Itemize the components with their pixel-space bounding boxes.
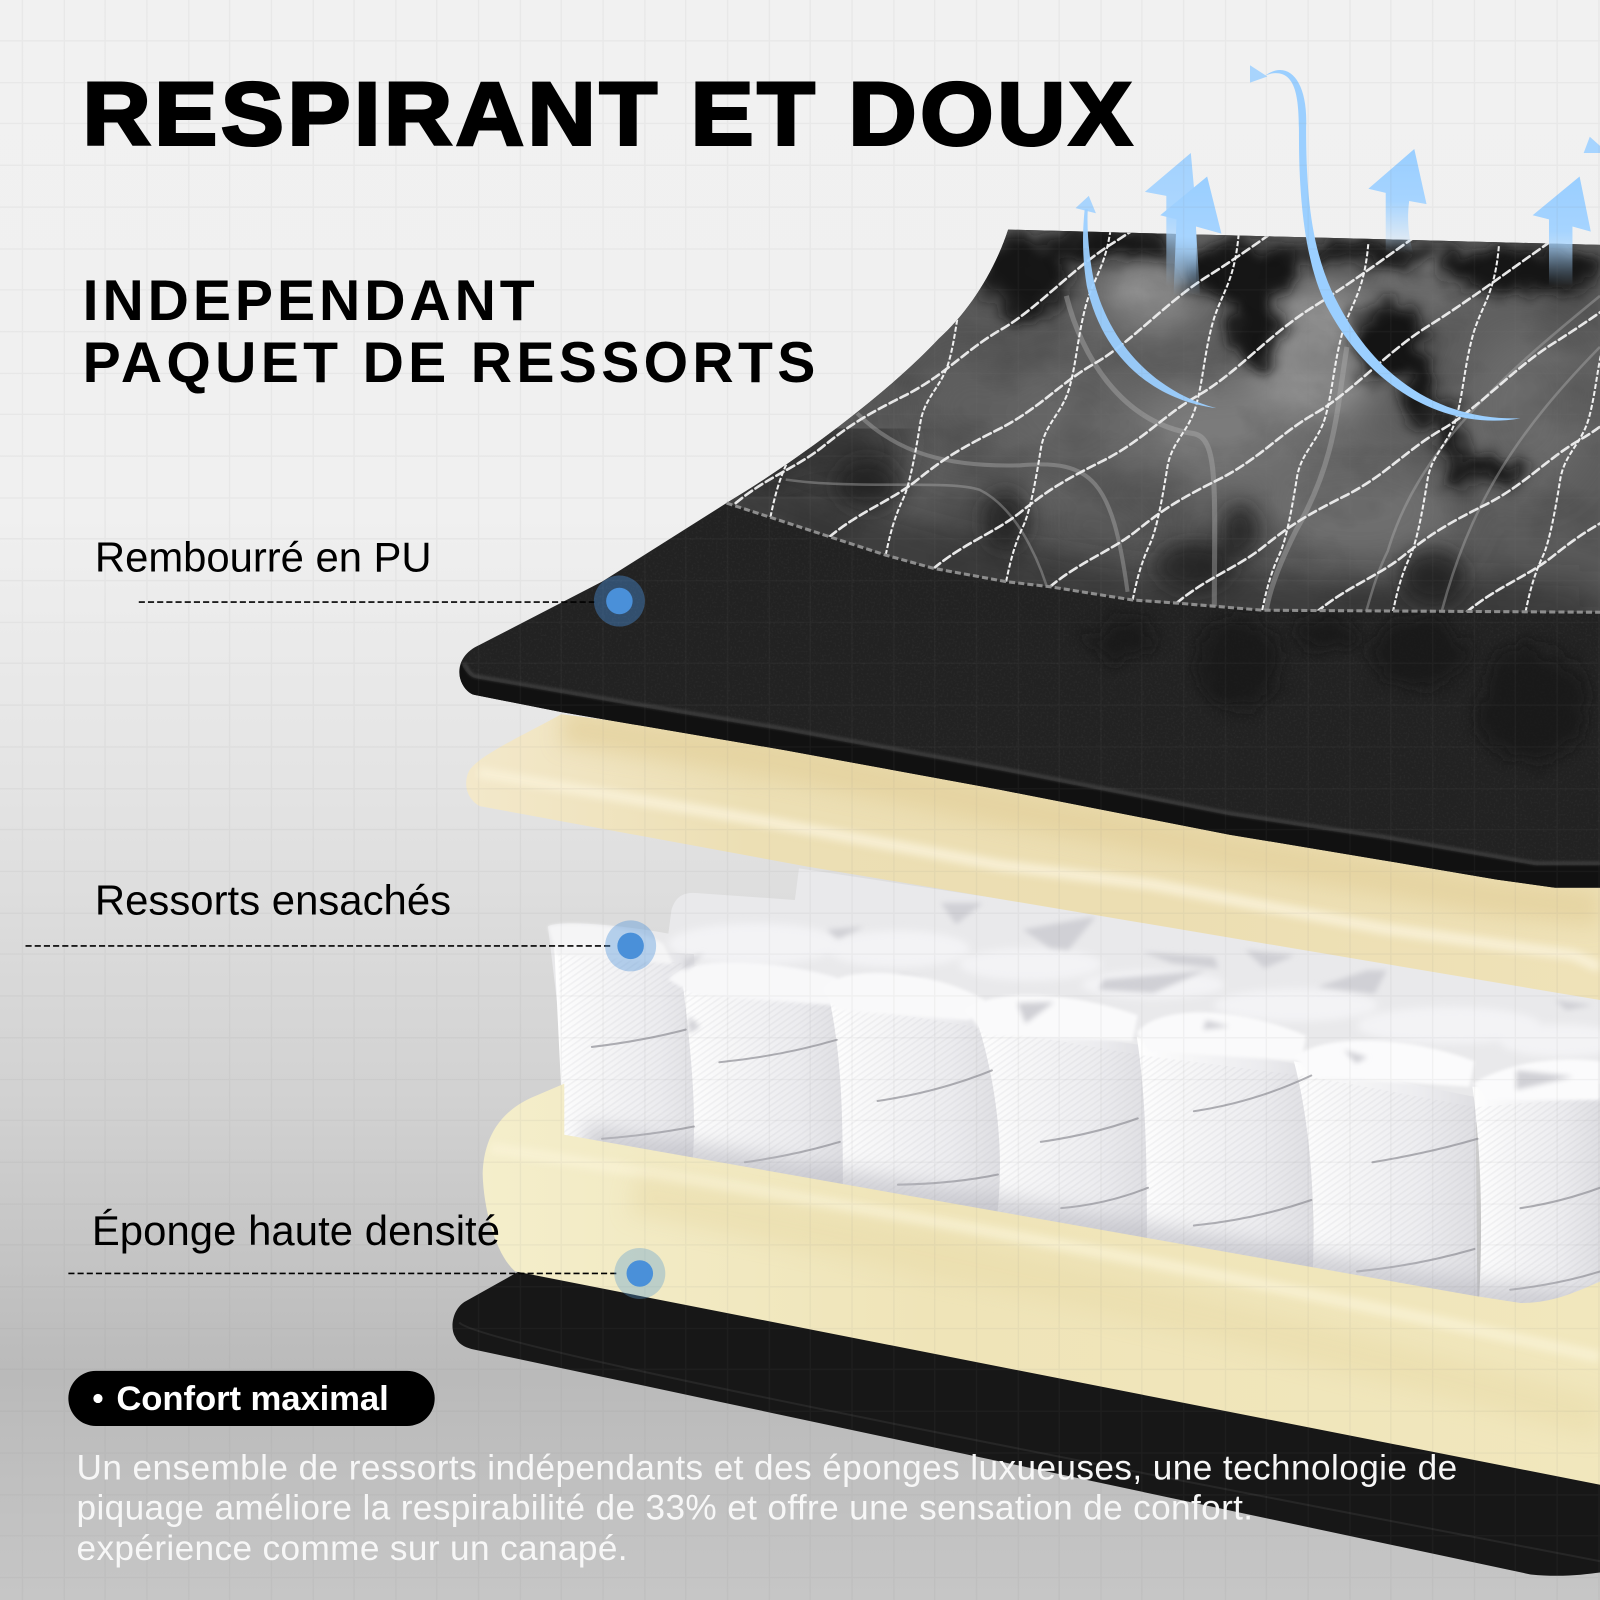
vertical stitching bbox=[770, 232, 1600, 611]
description paragraph: expérience comme sur un canapé. bbox=[77, 1529, 628, 1568]
faint air strands bbox=[786, 296, 1600, 622]
icon: block arrow 3 bbox=[1368, 149, 1427, 253]
layer: pocket springs bbox=[548, 868, 1600, 1327]
seam-side darkening bbox=[714, 480, 1600, 612]
diagonal stitching bbox=[734, 232, 1600, 612]
description paragraph bbox=[77, 1449, 1457, 1568]
badge: Confort maximal: Confort maximal bbox=[116, 1380, 389, 1418]
subtitle: PAQUET DE RESSORTS bbox=[83, 331, 815, 395]
subtitle: INDEPENDANT bbox=[83, 269, 535, 333]
dark ink blots upper bbox=[983, 229, 1600, 486]
callout: Rembourré en PU bbox=[95, 533, 645, 627]
leather grain bbox=[649, 536, 1566, 770]
title: RESPIRANT ET DOUX bbox=[83, 64, 1136, 163]
icon: edge arrow head bbox=[1584, 137, 1600, 153]
callout: Rembourré en PU: Rembourré en PU bbox=[95, 533, 432, 580]
airflow arrows bbox=[1076, 65, 1600, 421]
back rows of spring tops bbox=[548, 868, 1600, 1122]
spring seam lines bbox=[592, 1030, 1600, 1290]
layer: PU top cover bbox=[459, 230, 1600, 888]
spring collars bbox=[548, 924, 1600, 1100]
callout: Ressorts ensachés: Ressorts ensachés bbox=[95, 876, 451, 923]
icon: curved airflow arrow left bbox=[1076, 196, 1216, 408]
collar openings bbox=[685, 953, 1573, 1090]
subtitle bbox=[83, 269, 815, 395]
cover front edge band bbox=[449, 663, 1600, 898]
icon: block arrow 1 bbox=[1145, 153, 1196, 286]
icon: block arrow 2 bbox=[1160, 177, 1221, 296]
callout: Ressorts ensachés bbox=[26, 876, 656, 971]
shadow at foot of springs bbox=[584, 1141, 1600, 1311]
soft ink blots lower bbox=[835, 458, 1466, 605]
stitched seam arc bbox=[727, 503, 1600, 612]
darker shading below the seam bbox=[1087, 614, 1582, 765]
callout: Éponge haute densité bbox=[68, 1207, 665, 1299]
fabric weave bbox=[558, 949, 1600, 1327]
icon: curved airflow arrow right bbox=[1250, 65, 1520, 421]
badge: Confort maximal bbox=[68, 1371, 435, 1426]
quilted breathable panel bbox=[726, 230, 1600, 612]
layer: lower foam tray bbox=[483, 1084, 1600, 1485]
callout: Éponge haute densité: Éponge haute densité bbox=[92, 1207, 500, 1254]
front row spring pockets bbox=[554, 944, 1600, 1327]
description paragraph: piquage améliore la respirabilité de 33% et offre une sensation de confort. bbox=[77, 1488, 1253, 1527]
cover body bbox=[459, 230, 1600, 888]
icon: block arrow 4 bbox=[1533, 177, 1591, 286]
layer: upper foam bbox=[466, 714, 1600, 1000]
layer: bottom black base bbox=[452, 1269, 1600, 1576]
description paragraph: Un ensemble de ressorts indépendants et des éponges luxueuses, une technologie de bbox=[77, 1449, 1457, 1488]
wrinkle shadows bbox=[827, 903, 1593, 1010]
